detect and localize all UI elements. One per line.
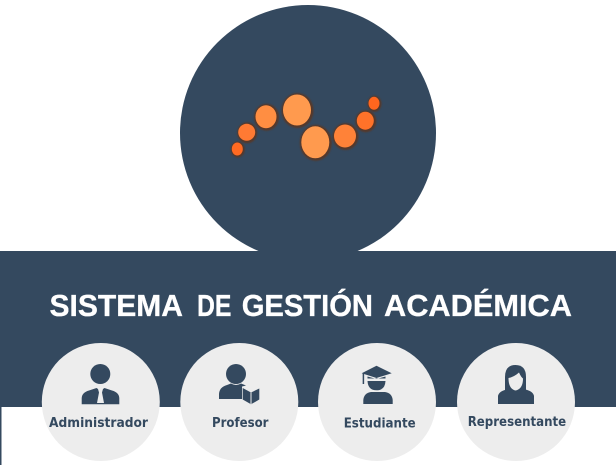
- logo: orange dots: [231, 93, 382, 161]
- title: GESTIÓN: [242, 287, 373, 323]
- icon: student with cap: [362, 366, 393, 404]
- title: DE: [197, 289, 232, 323]
- label: Representante: [468, 415, 566, 430]
- label: Profesor: [212, 416, 269, 431]
- top logo circle: [180, 5, 436, 261]
- title: ACADÉMICA: [384, 288, 572, 323]
- title: [50, 287, 572, 323]
- title: SISTEMA: [50, 289, 183, 323]
- icon: administrator: [82, 364, 119, 404]
- role: Administrador: [42, 343, 160, 461]
- icon: woman: [498, 365, 534, 404]
- icon: teacher with book: [219, 364, 259, 404]
- role: Estudiante: [318, 343, 436, 461]
- dark band: [0, 251, 616, 407]
- label: Estudiante: [344, 416, 416, 432]
- role: Profesor: [180, 343, 298, 461]
- label: Administrador: [49, 416, 149, 431]
- left edge line: [0, 407, 2, 465]
- role: Representante: [457, 343, 575, 461]
